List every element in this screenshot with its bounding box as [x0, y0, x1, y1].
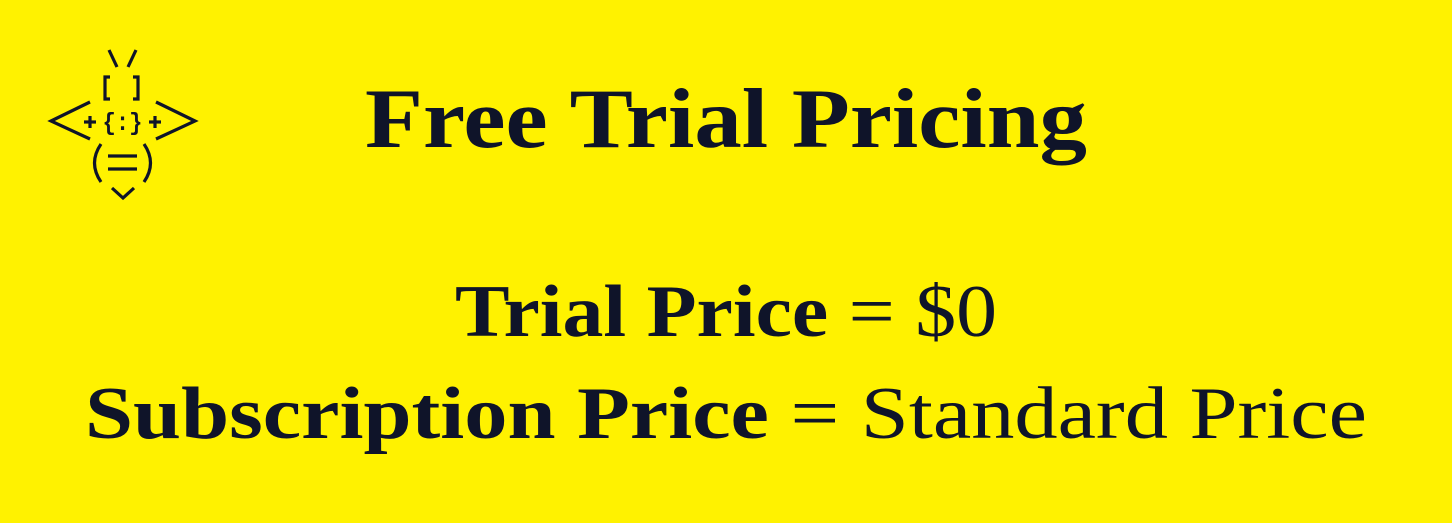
icon: ascii bee logo: {:}	[102, 109, 142, 138]
text block: trial price: Trial Price = $0	[455, 271, 997, 353]
title: Free Trial Pricing	[365, 72, 1087, 166]
text block: subscription price: Subscription Price = Standard Price	[85, 373, 1367, 455]
icon: ascii bee logo	[51, 50, 195, 198]
